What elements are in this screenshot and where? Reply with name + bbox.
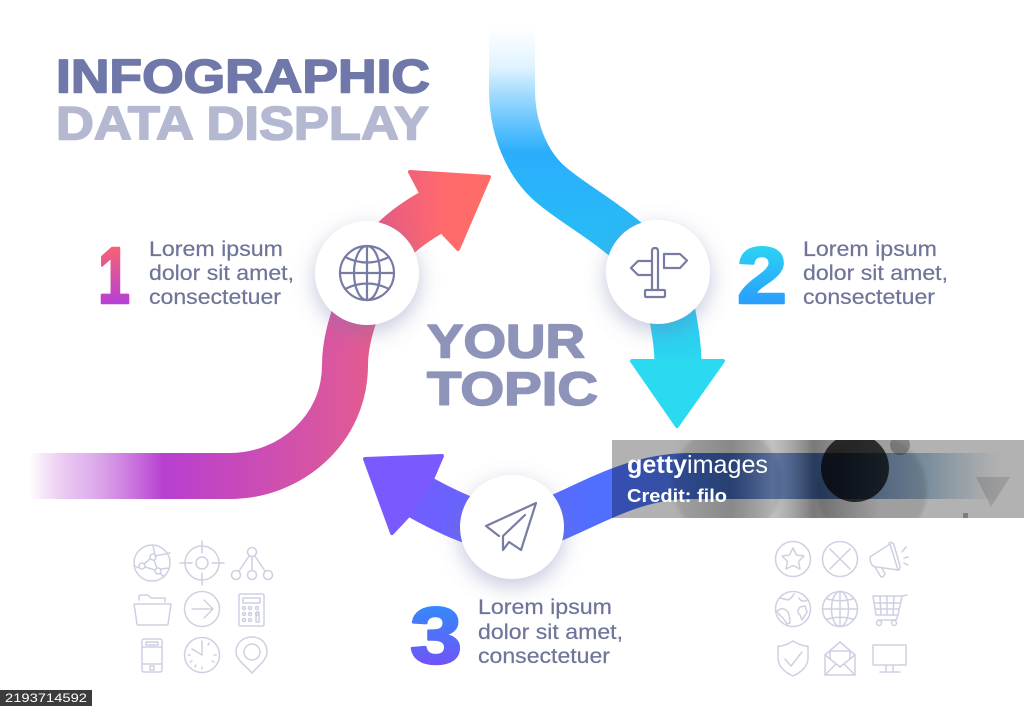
circle node 2 with signpost icon (606, 220, 710, 324)
watermark: stock credit banner (612, 440, 1024, 518)
icon set: left group (134, 541, 272, 673)
title: INFOGRAPHIC (56, 50, 430, 102)
number 2: 2 (737, 231, 787, 320)
icon: monitor (873, 645, 906, 672)
icon: target (180, 541, 224, 585)
title (56, 50, 430, 150)
icon: globe (340, 246, 394, 300)
icon: globe (822, 592, 858, 626)
icon: folder (134, 595, 171, 625)
image id tag: 2193714592 (5, 693, 87, 705)
arrow 2: light blue to cyan, pointing down (512, 28, 723, 426)
step 1 text: consectetuer (149, 286, 281, 309)
watermark text: Credit: filo (627, 486, 727, 506)
image id tag (0, 690, 92, 706)
icon: signpost (631, 248, 687, 297)
icon: clock (184, 638, 220, 672)
icon: map pin (236, 637, 267, 673)
icon: hierarchy (232, 548, 272, 580)
centre heading: your topic (427, 314, 598, 415)
step 1 text: Lorem ipsum (149, 238, 283, 261)
icon: smartphone (142, 639, 162, 672)
number 1: 1 (98, 231, 130, 320)
step 2 text: Lorem ipsum (803, 238, 937, 261)
icon: calculator (239, 594, 264, 626)
step 3 text (478, 596, 623, 668)
step 2 text (803, 238, 948, 309)
icon: shopping cart (873, 595, 907, 626)
arrow 3: blue to violet, pointing up left (365, 456, 1000, 533)
step 3 label (410, 591, 623, 680)
centre heading: your topic: TOPIC (427, 362, 598, 415)
title: DATA DISPLAY (56, 96, 429, 150)
number 3: 3 (410, 591, 462, 680)
step 1 label (98, 231, 294, 320)
step 2 text: consectetuer (803, 286, 935, 309)
icon: open envelope (825, 642, 855, 675)
icon: shield check (778, 641, 808, 676)
icon: paper plane (486, 503, 536, 550)
arrow 1: magenta to coral, pointing up right (30, 172, 489, 476)
watermark text: gettyimages (627, 451, 768, 479)
step 3 text: dolor sit amet, (478, 621, 623, 644)
icon: close badge (822, 542, 858, 576)
icon: network globe (134, 545, 170, 581)
step 1 text: dolor sit amet, (149, 262, 294, 285)
icon: earth (776, 592, 810, 626)
step 2 label (737, 231, 948, 320)
icon: star badge (776, 542, 810, 576)
watermark text (627, 451, 768, 506)
step 3 text: Lorem ipsum (478, 596, 612, 619)
circle node 3 with paper plane icon (460, 475, 564, 579)
icon: megaphone (870, 542, 908, 577)
icon set: right group (776, 542, 908, 676)
step 2 text: dolor sit amet, (803, 262, 948, 285)
circle node 1 with globe icon (315, 221, 419, 325)
icon: arrow circle (184, 592, 220, 626)
step 1 text (149, 238, 294, 309)
step 3 text: consectetuer (478, 645, 610, 668)
centre heading: your topic: YOUR (427, 314, 585, 368)
